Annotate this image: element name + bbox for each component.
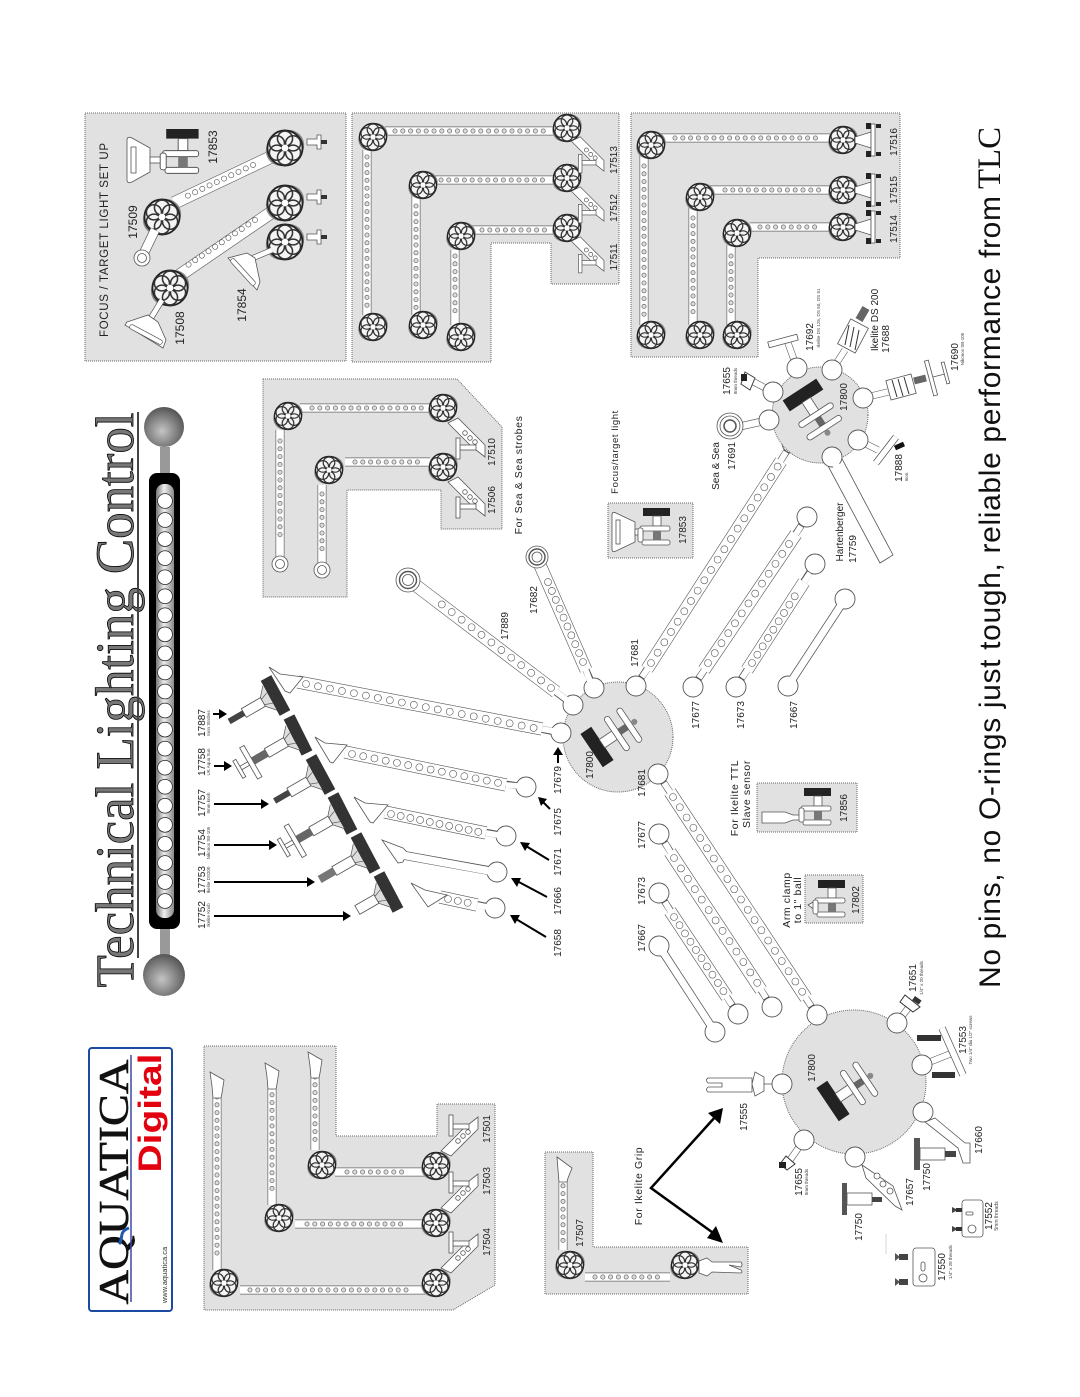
blade 17759 Hartenberger: Hartenberger [835,502,846,561]
cage 17688 [822,288,892,380]
arm 17682: 17682 [529,586,540,614]
arm 17679 [269,667,571,743]
labels: mount part numbers: Nikonos SB-105 [206,826,211,859]
stub 17655 [779,1130,814,1196]
arm 17667 lower: 17667 [637,924,648,952]
box: 17853 focus target light: Focus/target light [610,410,621,494]
plate 17888: Inon [904,472,909,481]
arm 17657 [845,1147,916,1210]
title: Technical Lighting Control: Technical Lighting Control [85,412,145,988]
panel: focus target light set up [85,113,346,361]
arrows: arm ends [510,747,563,937]
stub 17651: 1/4" x 20 threads [919,960,924,995]
stub 17651 [887,960,924,1033]
cage 17690 [853,332,965,408]
labels: 17516 [889,128,900,156]
heading: focus target: FOCUS / TARGET LIGHT SET UP [99,143,111,337]
labels: mount part numbers: 17754 [197,829,208,857]
arm 17508 [180,212,272,275]
stub 17655: 17655 [794,1168,805,1196]
arm 17677 upper [683,507,817,729]
box: 17853 focus target light: 17853 [678,516,689,544]
labels: arm part numbers: 17675 [553,808,564,836]
ring 17691 [711,410,779,490]
arms [563,1170,670,1277]
labels: mount part numbers: 17887 [197,709,208,737]
hub 1: 17800 bottom [706,960,985,1210]
clamp bars and mounts [228,678,398,922]
thumbscrew 17750 right: 17750 [922,1163,933,1191]
stub 17651: 17651 [908,964,919,992]
plate 17692 [768,288,821,378]
cage 17688: 17688 [881,325,892,353]
arm 17658 [411,883,505,918]
grip 17555: 17555 [739,1103,750,1131]
labels: mount part numbers: Inon Strobes [206,709,211,736]
labels: 17853 [206,130,220,164]
arms [367,131,557,325]
arm 17660: 17660 [974,1126,985,1154]
labels: 17513 [609,146,620,174]
clamps [353,108,604,357]
arm 17666 [382,840,507,882]
stub 17655: 8mm threads [804,1168,809,1195]
grip 17854 [228,250,272,290]
arm 17673 upper: 17673 [736,701,747,729]
tagline: TLC [972,127,1008,189]
logo: Aquatica Digital: AQUATICA [92,1059,138,1304]
hub 2: 17800 centre [563,682,673,792]
clamps [631,120,881,355]
thumbscrew 17750 right [914,1138,956,1191]
tips [210,1052,322,1098]
clamps [204,1115,478,1303]
labels: 17503 [482,1167,493,1195]
arm 17667 upper [778,589,855,729]
plate 17550: 1/4" x 28 threads [948,1244,953,1279]
labels: 17515 [889,176,900,204]
stub 17655: 17655 [722,367,733,395]
plate 17550 [886,1234,953,1286]
arm 17677 lower [637,821,782,1017]
plate 17888: 17888 [894,454,905,482]
blade 17759 Hartenberger [822,447,893,563]
labels: 17854 [235,288,249,322]
box: 17802 arm clamp to 1 inch ball: to 1" ball [792,877,804,923]
thumbscrew 17750 left [842,1183,882,1241]
box: 17856 Ikelite TTL slave sensor: Slave sensor [741,760,753,828]
tip [557,1157,572,1182]
labels [889,128,900,243]
labels: 17501 [482,1115,493,1143]
plate 17692: 17692 [805,323,816,351]
panel: 17507 for Ikelite grip [545,1152,748,1294]
grip [699,1258,742,1276]
plate 17552 [952,1200,1000,1237]
labels: 17512 [609,194,620,222]
arm 17671 [354,797,516,846]
thumbscrew 17750 left: 17750 [854,1213,865,1241]
labels: 17509 [126,205,140,239]
clamps [550,1245,705,1285]
hub 3: 17800 right [711,288,965,563]
labels: 17506 [487,486,498,514]
box: 17856 Ikelite TTL slave sensor: For Ikelite TTL [729,760,741,836]
plate 17552: 5mm threads [994,1201,1000,1231]
labels: mount part numbers: 17757 [197,789,208,817]
stub 17655: 8mm threads [733,367,738,394]
plate 17888 [848,430,909,482]
caption and arrows: for Ikelite grip: For Ikelite Grip [633,1147,645,1225]
arms [644,138,830,325]
arm 17509 [174,157,271,203]
arm 17667 upper: 17667 [789,701,800,729]
labels: arm part numbers: 17679 [553,766,564,794]
labels: 17510 [487,438,498,466]
ring 17691: 17691 [727,442,738,470]
labels: mount part numbers: 17752 [197,901,208,929]
labels: mount part numbers: 17753 [197,866,208,894]
rings [272,556,330,578]
labels: arm part numbers: 17666 [553,887,564,915]
labels: mount part numbers: UK Aqua Sun [206,748,211,776]
labels: 17504 [482,1228,493,1256]
title arm graphic [143,407,185,996]
clamps [268,388,485,518]
arm 17682 [526,546,604,698]
logo: Aquatica Digital [89,1048,172,1311]
threads [228,710,336,883]
fork 17853 [127,129,199,183]
tagline: No pins, no O-rings just tough, reliable performance from [974,196,1007,988]
caption: for sea and sea strobes: For Sea & Sea strobes [513,416,525,534]
arm 17681 upper [626,433,802,696]
labels [609,146,620,271]
connector ring 17509 [134,230,155,266]
arms [280,408,430,565]
label: 17507 [575,1219,586,1247]
caption and arrows: for Ikelite grip [633,1108,723,1243]
box: 17802 arm clamp to 1 inch ball: Arm clamp [781,872,793,928]
arm 17660 [913,1102,985,1163]
hub 1: 17800 bottom: 17800 [807,1054,818,1082]
labels: 17514 [889,215,900,243]
logo: Aquatica Digital: www.aquatica.ca [160,1246,169,1304]
stub 17655 [722,367,783,402]
labels [482,1115,493,1256]
panel: 17511 17512 17513 [352,108,620,362]
ring 17691: Sea & Sea [711,442,722,490]
panel: 17514 17515 17516 [631,113,900,357]
arm 17681 lower [637,764,827,1025]
box: 17853 focus target light [608,410,693,558]
plate 17552: 17552 [984,1202,995,1230]
labels: mount part numbers: 8mm knob [206,792,211,814]
arm 17677 upper: 17677 [691,701,702,729]
hub 3: 17800 right: 17800 [839,383,850,411]
cage 17690: Nikonos SB-105 [960,332,965,365]
labels: arm part numbers [553,766,564,957]
box: 17856 Ikelite TTL slave sensor [729,760,857,836]
arm 17675 [315,737,536,797]
arm 17673 lower: 17673 [637,877,648,905]
blade 17759 Hartenberger: 17759 [848,535,859,563]
box: 17856 Ikelite TTL slave sensor: 17856 [839,794,850,822]
labels: arm part numbers: 17671 [553,848,564,876]
labels: mount part numbers: Ikelite Knob [206,903,211,927]
panel: 17501 17503 17504 [204,1046,495,1310]
cage 17688: Ikelite DS 200 [870,288,881,351]
plate 17553: 17553 [958,1026,969,1054]
arm 17677 lower: 17677 [637,821,648,849]
arm 17673 lower [637,877,748,1024]
box: 17802 arm clamp to 1 inch ball [781,872,863,928]
box: 17802 arm clamp to 1 inch ball: 17802 [851,886,862,914]
labels [487,438,498,514]
arrows: mounts [213,709,351,921]
panel: 17506 17510 sea and sea [263,379,502,597]
labels: mount part numbers [197,709,211,929]
plate 17692: Ikelite DS 125, DS 50, DS 51 [816,288,821,348]
plate 17553 [912,1015,973,1075]
labels: arm part numbers: 17658 [553,929,564,957]
arm 17681 upper: 17681 [630,639,641,667]
labels: 17508 [173,311,187,345]
arm 17657: 17657 [905,1178,916,1206]
grip 17555 [706,1072,792,1131]
arm 17667 lower [637,924,725,1042]
arms [217,1070,425,1290]
arm 17681 lower: 17681 [637,769,648,797]
plate 17553: Two 1/4" dia 1/2" screws [968,1015,973,1064]
clamps [136,123,327,313]
arm 17889: 17889 [500,612,511,640]
labels [126,130,249,345]
arm 17673 upper [726,554,825,729]
logo: Aquatica Digital: Digital [132,1054,168,1172]
labels: mount part numbers: 17758 [197,748,208,776]
labels: 17511 [609,243,620,271]
cage 17690: 17690 [950,343,961,371]
grip 17508 [125,300,166,348]
labels: mount part numbers: Ikelite DS200 [206,866,211,893]
plate 17550: 17550 [937,1253,948,1281]
arm 17889 [396,568,583,715]
hub 2: 17800 centre: 17800 [585,751,596,779]
